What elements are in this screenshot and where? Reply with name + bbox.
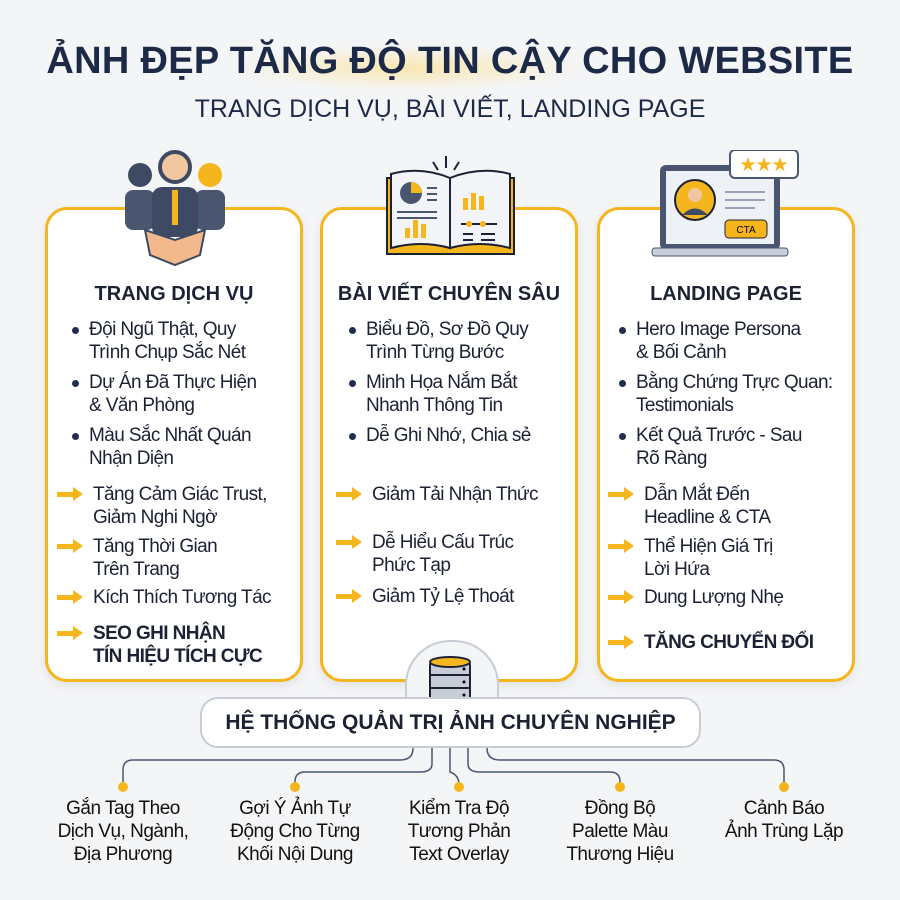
list: bai viet: [336, 319, 538, 607]
list: trang dich vu: Giảm Nghi Ngờ: [93, 507, 217, 528]
list: landing: Testimonials: [636, 395, 733, 416]
bottom items: Khối Nội Dung: [237, 844, 353, 865]
panel: landing page: [597, 207, 855, 682]
list: trang dich vu: Kích Thích Tương Tác: [93, 587, 271, 608]
list: landing: & Bối Cảnh: [636, 342, 726, 363]
bottom items: [58, 796, 843, 865]
panel: trang dich vu: [45, 207, 303, 682]
list: bai viet: Biểu Đồ, Sơ Đồ Quy: [366, 319, 528, 340]
database circle backdrop: [405, 640, 499, 722]
list: bai viet: Phức Tạp: [372, 555, 450, 576]
bottom items: Địa Phương: [74, 844, 172, 865]
title: ẢNH ĐẸP TĂNG ĐỘ TIN CẬY CHO WEBSITE: [46, 40, 854, 82]
list: bai viet: Dễ Ghi Nhớ, Chia sẻ: [366, 425, 531, 446]
list: trang dich vu: Trên Trang: [93, 559, 179, 580]
list: trang dich vu: & Văn Phòng: [89, 395, 194, 416]
list: bai viet: Nhanh Thông Tin: [366, 395, 502, 416]
icon: database: [429, 656, 471, 697]
subtitle: TRANG DỊCH VỤ, BÀI VIẾT, LANDING PAGE: [195, 95, 705, 123]
list: bai viet: Minh Họa Nắm Bắt: [366, 372, 517, 393]
bottom items: Text Overlay: [409, 844, 509, 865]
list: trang dich vu: Dự Án Đã Thực Hiện: [89, 372, 256, 393]
icon: laptop landing page: [652, 150, 799, 256]
list: trang dich vu: Nhận Diện: [89, 448, 173, 469]
title highlight: [230, 45, 590, 91]
list: landing: TĂNG CHUYỂN ĐỔI: [644, 632, 813, 653]
bottom items: Gợi Ý Ảnh Tự: [239, 798, 351, 819]
list: landing: Headline & CTA: [644, 507, 770, 528]
bottom items: Tương Phản: [408, 821, 510, 842]
list: landing: [608, 319, 833, 653]
list: trang dich vu: [57, 319, 271, 667]
list: landing: Bằng Chứng Trực Quan:: [636, 372, 833, 393]
list: landing: Thể Hiện Giá Trị: [644, 536, 773, 557]
list: bai viet: Giảm Tải Nhận Thức: [372, 484, 538, 505]
icon: laptop landing page: ★★★: [740, 157, 788, 174]
bottom items: Đồng Bộ: [585, 798, 655, 819]
list: trang dich vu: Tăng Cảm Giác Trust,: [93, 484, 267, 505]
icon: laptop landing page: CTA: [736, 225, 756, 236]
panel: bai viet: [320, 207, 578, 682]
pill: he thong quan tri anh: [200, 697, 701, 748]
heading: landing: LANDING PAGE: [650, 283, 802, 305]
bottom items: Gắn Tag Theo: [66, 798, 180, 819]
icon: team handshake: [125, 150, 225, 266]
heading: bai viet: BÀI VIẾT CHUYÊN SÂU: [338, 283, 560, 305]
bottom items: Ảnh Trùng Lặp: [725, 821, 843, 842]
heading: trang dich vu: TRANG DỊCH VỤ: [95, 283, 253, 305]
list: landing: Hero Image Persona: [636, 319, 801, 340]
list: bai viet: Trình Từng Bước: [366, 342, 504, 363]
bottom items: Dịch Vụ, Ngành,: [58, 821, 188, 842]
bottom items: Kiểm Tra Độ: [409, 798, 509, 819]
list: landing: Dẫn Mắt Đến: [644, 484, 749, 505]
list: landing: Lời Hứa: [644, 559, 709, 580]
list: trang dich vu: Đội Ngũ Thật, Quy: [89, 319, 236, 340]
list: trang dich vu: Tăng Thời Gian: [93, 536, 217, 557]
bottom items: Cảnh Báo: [744, 798, 824, 819]
icon: open book: [386, 156, 515, 255]
list: landing: Kết Quả Trước - Sau: [636, 425, 802, 446]
connector lines: [118, 748, 789, 792]
list: trang dich vu: TÍN HIỆU TÍCH CỰC: [93, 646, 262, 667]
bottom items: Palette Màu: [572, 821, 668, 842]
list: trang dich vu: Màu Sắc Nhất Quán: [89, 425, 251, 446]
list: bai viet: Dễ Hiểu Cấu Trúc: [372, 532, 513, 553]
bottom items: Thương Hiệu: [566, 844, 674, 865]
pill: he thong quan tri anh: HỆ THỐNG QUẢN TRỊ ẢNH CHUYÊN NGHIỆP: [225, 711, 676, 734]
list: trang dich vu: Trình Chụp Sắc Nét: [89, 342, 245, 363]
list: bai viet: Giảm Tỷ Lệ Thoát: [372, 586, 514, 607]
bottom items: Động Cho Từng: [230, 821, 360, 842]
list: trang dich vu: SEO GHI NHẬN: [93, 623, 225, 644]
list: landing: Rõ Ràng: [636, 448, 707, 469]
list: landing: Dung Lượng Nhẹ: [644, 587, 783, 608]
